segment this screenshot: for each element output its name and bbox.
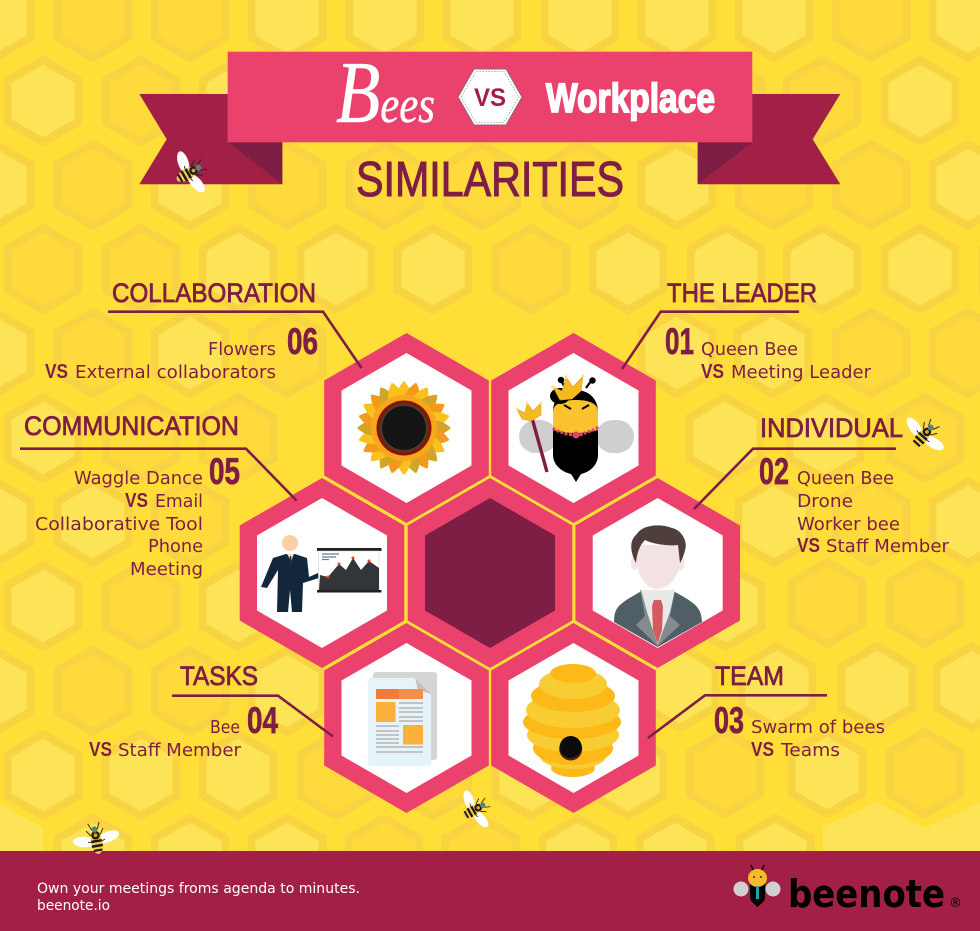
heading: similarities: SIMILARITIES (356, 153, 624, 207)
text: comparison: Teams (780, 740, 840, 761)
icon: document (368, 672, 437, 766)
heading: COMMUNICATION (24, 411, 239, 441)
banner: ribbon with title (139, 45, 840, 184)
number: 03 (714, 700, 744, 741)
footer text: beenote.io (37, 898, 110, 914)
bee: below tasks hexagon (452, 783, 499, 835)
icon: businessman portrait (614, 525, 702, 647)
text: comparison: Bee (210, 717, 240, 738)
footer text (37, 881, 360, 914)
sceptre (515, 401, 547, 472)
hexagon: centre (408, 478, 572, 668)
bee: beside individual heading (896, 406, 953, 462)
text: comparison: Email (155, 491, 203, 512)
hexagon: collaboration (324, 333, 489, 523)
registered mark: ® (949, 896, 962, 911)
text: comparison: VS (701, 361, 724, 383)
text: comparison: Worker bee (797, 514, 900, 535)
callout: tasks (89, 661, 333, 761)
number: 01 (665, 321, 694, 362)
text: comparison: External collaborators (75, 362, 276, 383)
head (553, 400, 598, 433)
text: comparison: Flowers (208, 339, 276, 360)
title word: Workplace: Workplace (546, 75, 715, 121)
text: comparison: Phone (148, 536, 203, 557)
text: comparison: VS (797, 535, 820, 557)
icon: presenter with chart (261, 535, 382, 612)
connector (20, 449, 296, 500)
hexagon: communication (240, 478, 404, 668)
number: 04 (247, 700, 278, 741)
text: comparison: Meeting (130, 559, 203, 580)
text: comparison (89, 717, 242, 761)
connector (172, 696, 333, 736)
logo wordmark: beenote (788, 872, 945, 916)
body (553, 390, 598, 482)
number: 06 (287, 321, 318, 362)
vs hexagon badge: VS (474, 84, 506, 112)
text: comparison (701, 339, 872, 383)
text: comparison: Collaborative Tool (35, 514, 203, 535)
vs hexagon badge (458, 69, 522, 125)
necklace (552, 426, 599, 438)
icon: queen bee (515, 374, 634, 482)
callout: collaboration (45, 278, 362, 383)
footer band (0, 851, 980, 931)
connector (622, 312, 799, 369)
heading: THE LEADER (667, 278, 817, 308)
heading: COLLABORATION (112, 278, 316, 308)
text: comparison: Staff Member (118, 740, 242, 761)
title word: Bees: Bees (336, 45, 435, 142)
hexagon: tasks (324, 623, 489, 813)
callout: individual (694, 413, 950, 557)
text: comparison: Meeting Leader (731, 362, 872, 383)
text: comparison: VS (751, 739, 774, 761)
callout: team (648, 661, 885, 761)
bee: on left ribbon (165, 143, 216, 201)
text: comparison (35, 468, 203, 580)
heading: TASKS (180, 661, 258, 691)
text: comparison (45, 339, 276, 383)
text: comparison: VS (89, 739, 112, 761)
heading: INDIVIDUAL (760, 413, 903, 443)
hexagon: individual (575, 478, 740, 668)
logo bee (734, 865, 780, 907)
text: comparison (797, 468, 950, 557)
logo: beenote (734, 865, 962, 916)
number: 02 (759, 451, 789, 492)
text: comparison (751, 717, 885, 761)
hexagon: team (491, 623, 656, 813)
hexagon cluster (240, 333, 740, 813)
number: 05 (209, 451, 240, 492)
callout: the leader (622, 278, 872, 383)
antennae (561, 380, 591, 388)
icon: sunflower (356, 380, 452, 476)
text: comparison: Queen Bee (701, 339, 798, 360)
connector (108, 312, 362, 368)
icon: beehive (523, 664, 621, 777)
bee: above footer (69, 819, 123, 858)
callout: communication (20, 411, 296, 580)
footer text: Own your meetings froms agenda to minutes. (37, 881, 360, 897)
hexagon: the leader (491, 333, 656, 523)
text: comparison: Staff Member (826, 536, 950, 557)
connector (648, 695, 827, 738)
text: comparison: VS (125, 490, 148, 512)
text: comparison: Drone (797, 491, 853, 512)
text: comparison: VS (45, 361, 68, 383)
crown (551, 374, 585, 400)
wings (519, 420, 634, 453)
connector (694, 449, 896, 509)
text: comparison: Waggle Dance (74, 468, 203, 489)
text: comparison: Queen Bee (797, 468, 894, 489)
heading: TEAM (715, 661, 784, 691)
text: comparison: Swarm of bees (751, 717, 885, 738)
